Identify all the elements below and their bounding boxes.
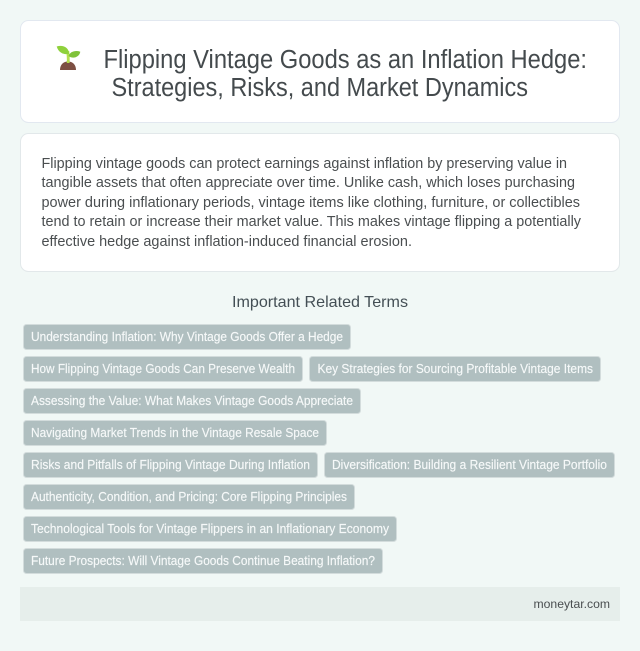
tag 3: Key Strategies for Sourcing Profitable Vintage Items — [318, 362, 593, 376]
footer source text: moneytar.com — [534, 597, 610, 611]
tag 7 — [324, 452, 614, 478]
tag 4: Assessing the Value: What Makes Vintage Goods Appreciate — [31, 394, 353, 408]
tag 8 — [24, 484, 354, 510]
text block: description — [42, 156, 582, 250]
tag 1 — [24, 324, 350, 350]
tag 3 — [310, 356, 600, 382]
tag 2: How Flipping Vintage Goods Can Preserve Wealth — [31, 362, 295, 376]
tag 1: Understanding Inflation: Why Vintage Goods Offer a Hedge — [31, 330, 343, 344]
title: Flipping Vintage Goods as an Inflation Hedge: — [104, 46, 587, 74]
title — [104, 46, 587, 102]
tag 8: Authenticity, Condition, and Pricing: Core Flipping Principles — [31, 490, 347, 504]
tag 9 — [24, 516, 396, 542]
tag 9: Technological Tools for Vintage Flippers in an Inflationary Economy — [31, 522, 390, 536]
tag 10: Future Prospects: Will Vintage Goods Continue Beating Inflation? — [31, 554, 375, 568]
panel: description card — [20, 134, 620, 272]
title: Strategies, Risks, and Market Dynamics — [112, 74, 528, 102]
text block: description: tangible assets that often appreciate over time. Unlike cash, which loses purchasing — [42, 175, 575, 191]
tag 10 — [24, 548, 382, 574]
tag 7: Diversification: Building a Resilient Vintage Portfolio — [332, 458, 607, 472]
tag list — [24, 324, 614, 574]
tag 2 — [24, 356, 302, 382]
text block: description: power during inflationary periods, vintage items like clothing, furniture, or collectibles — [42, 195, 580, 211]
heading: related terms: Important Related Terms — [232, 294, 408, 311]
text block: description: Flipping vintage goods can protect earnings against inflation by preserving value in — [42, 156, 567, 172]
footer — [20, 587, 620, 621]
text block: description: effective hedge against inflation-induced financial erosion. — [42, 234, 412, 250]
text block: description: tend to retain or increase their market value. This makes vintage flipping a potentially — [42, 214, 582, 230]
tag 4 — [24, 388, 360, 414]
tag 5 — [24, 420, 326, 446]
tag 6: Risks and Pitfalls of Flipping Vintage During Inflation — [31, 458, 310, 472]
icon: seedling — [57, 46, 80, 70]
tag 6 — [24, 452, 318, 478]
panel: title card — [20, 20, 620, 122]
tag 5: Navigating Market Trends in the Vintage Resale Space — [31, 426, 319, 440]
